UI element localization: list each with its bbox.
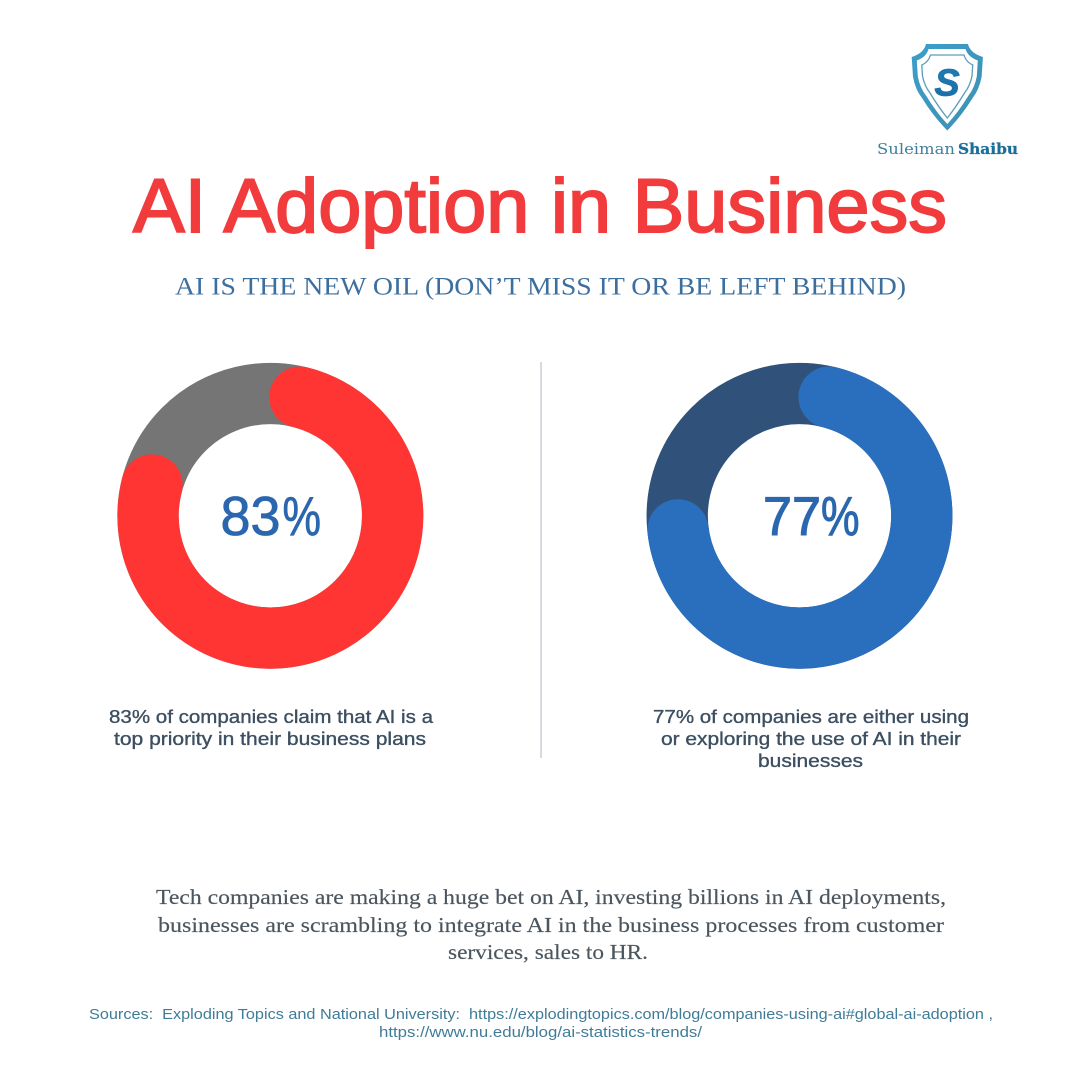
caption: 83% (109, 706, 434, 749)
icon: shield with S: S (934, 62, 960, 104)
panel: 77% using or exploring stat (653, 394, 969, 771)
icon: shield with S (912, 44, 983, 130)
body paragraph: businesses are scrambling to integrate AI in the business processes from customer (158, 913, 944, 937)
donut value: 77%: 77 (763, 485, 821, 547)
caption: 77%: 77% of companies are either using (653, 706, 969, 727)
donut value: 83%: 83 (220, 485, 280, 547)
caption: 77%: businesses (758, 750, 863, 771)
logo wordmark: Shaibu (958, 140, 1018, 158)
subtitle: AI IS THE NEW OIL (DON’T MISS IT OR BE LEFT BEHIND) (175, 272, 906, 300)
logo: Suleiman Shaibu (877, 44, 1018, 158)
body paragraph: Tech companies are making a huge bet on AI, investing billions in AI deployments, (156, 885, 946, 909)
sources: https://www.nu.edu/blog/ai-statistics-trends/ (379, 1025, 703, 1041)
sources (89, 1007, 993, 1041)
logo wordmark: Suleiman (877, 142, 955, 158)
sources: Sources: Exploding Topics and National University: https://explodingtopics.com/blog/companies-using-ai#global-ai-adoption , (89, 1007, 993, 1023)
caption: 83%: 83% of companies claim that AI is a (109, 706, 434, 727)
caption: 77%: or exploring the use of AI in their (661, 728, 961, 749)
body paragraph (156, 885, 946, 964)
divider line (540, 362, 542, 758)
donut chart: 77% (677, 394, 922, 638)
donut value: 83%: % (282, 485, 321, 547)
body paragraph: services, sales to HR. (448, 940, 648, 964)
donut value: 77%: % (821, 485, 860, 547)
caption: 77% (653, 706, 969, 771)
panel: 83% priority stat (109, 394, 434, 749)
caption: 83%: top priority in their business plans (114, 728, 426, 749)
title: AI Adoption in Business (133, 164, 947, 249)
donut chart: 83% (148, 394, 393, 638)
logo wordmark (877, 140, 1018, 158)
